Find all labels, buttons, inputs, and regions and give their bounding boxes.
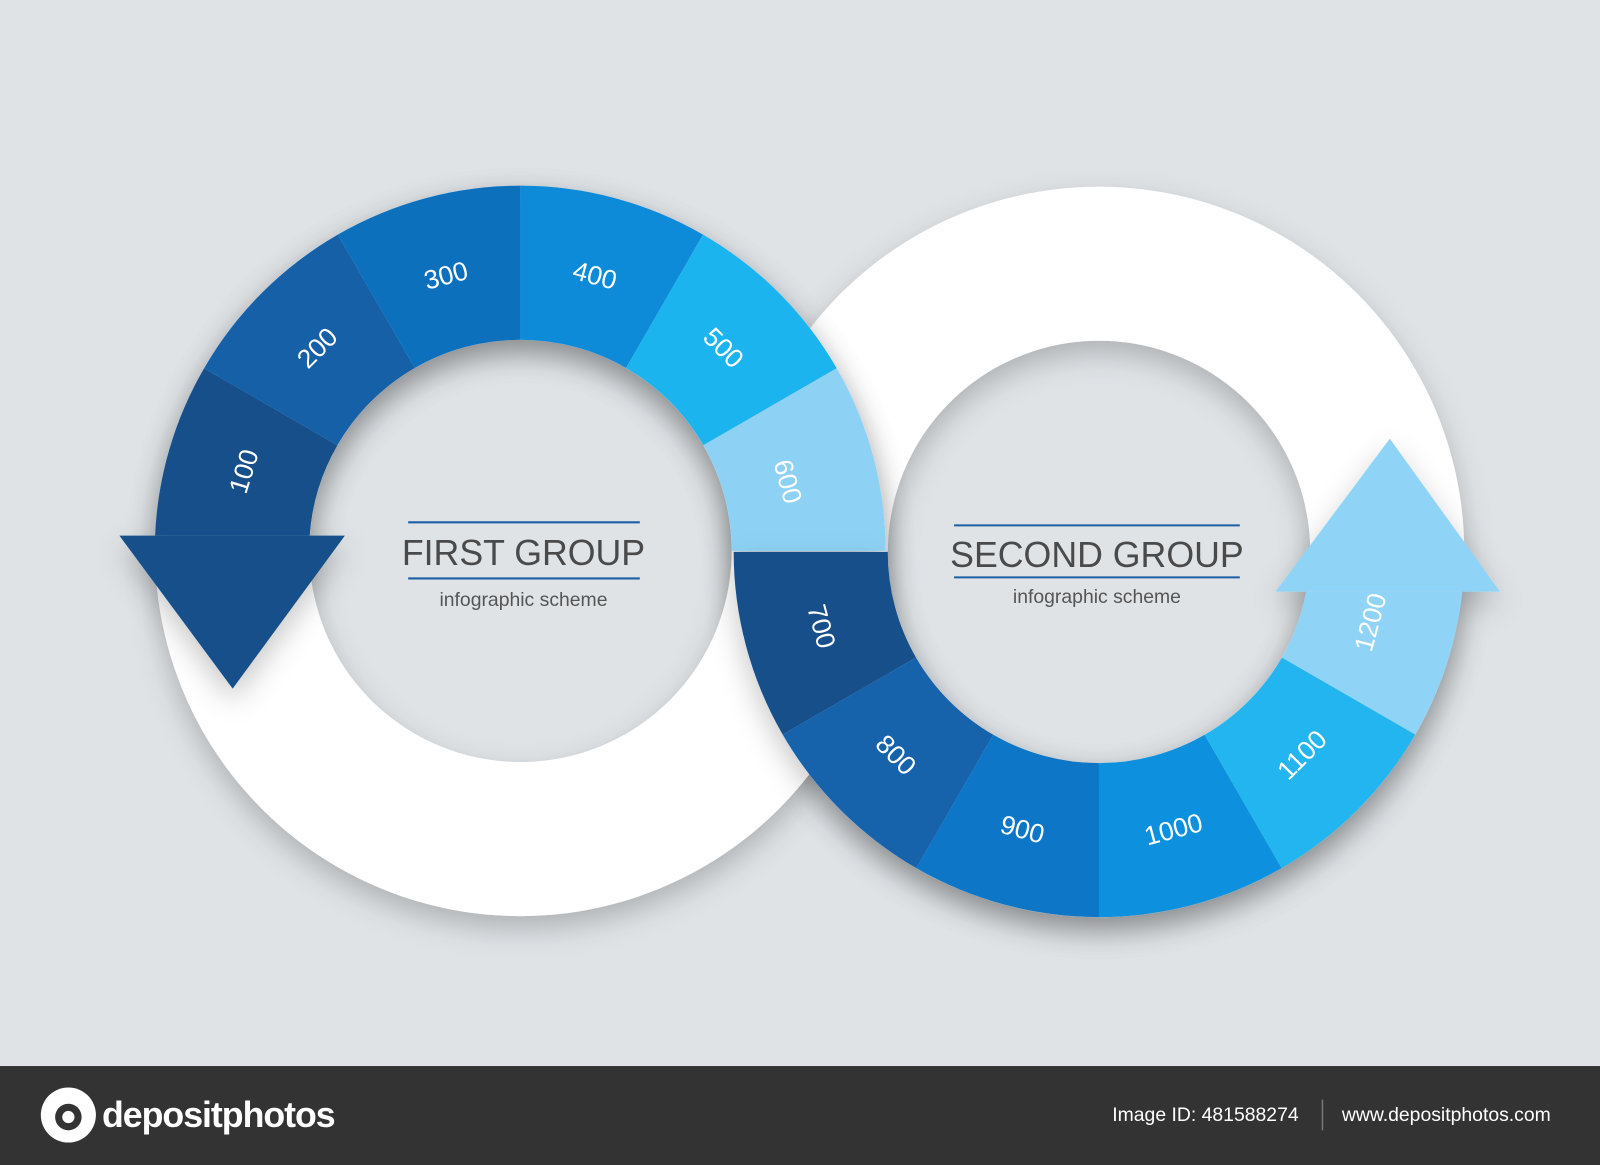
segment 600 <box>703 368 886 551</box>
logo icon <box>41 1087 96 1143</box>
website: www.depositphotos.com <box>1341 1104 1551 1126</box>
segment 900 <box>916 735 1099 917</box>
segment labels: 500 <box>697 322 750 374</box>
image id: Image ID: 481588274 <box>1112 1104 1299 1126</box>
right blue arrow ring <box>734 439 1500 917</box>
segment 1200 <box>1282 592 1462 735</box>
segment labels: 1000 <box>1141 807 1206 851</box>
footer bar <box>0 1066 1600 1165</box>
second group heading: SECOND GROUP <box>950 535 1244 575</box>
segment labels: 1100 <box>1271 724 1333 786</box>
segment 800 <box>783 657 993 868</box>
segment 200 <box>204 235 415 445</box>
logo text: depositphotos <box>102 1095 335 1135</box>
segment 1100 <box>1205 657 1415 868</box>
segment labels: 200 <box>291 322 344 374</box>
first group heading <box>402 522 645 611</box>
segment labels: 600 <box>768 456 808 507</box>
segment 400 <box>520 186 703 368</box>
first group heading: FIRST GROUP <box>402 533 645 573</box>
right white ring <box>734 187 1464 917</box>
segment labels: 700 <box>801 601 842 652</box>
segment labels: 900 <box>997 809 1048 850</box>
segment 700 <box>734 552 916 735</box>
segment 500 <box>626 235 837 445</box>
segment labels: 300 <box>421 255 471 296</box>
segment labels: 400 <box>570 255 620 296</box>
arrowhead left <box>119 536 345 689</box>
segment labels <box>223 255 1393 851</box>
segment labels: 800 <box>870 729 922 781</box>
segment 100 <box>155 368 337 536</box>
second group heading <box>950 525 1244 608</box>
left white ring <box>155 186 886 916</box>
segment labels: 1200 <box>1348 590 1393 655</box>
second group heading: infographic scheme <box>1013 586 1181 608</box>
arrowhead right <box>1276 439 1500 592</box>
left blue arrow ring <box>119 186 886 689</box>
segment 1000 <box>1099 735 1282 917</box>
segment 300 <box>338 186 520 368</box>
segment labels: 100 <box>223 446 265 497</box>
first group heading: infographic scheme <box>439 589 607 611</box>
